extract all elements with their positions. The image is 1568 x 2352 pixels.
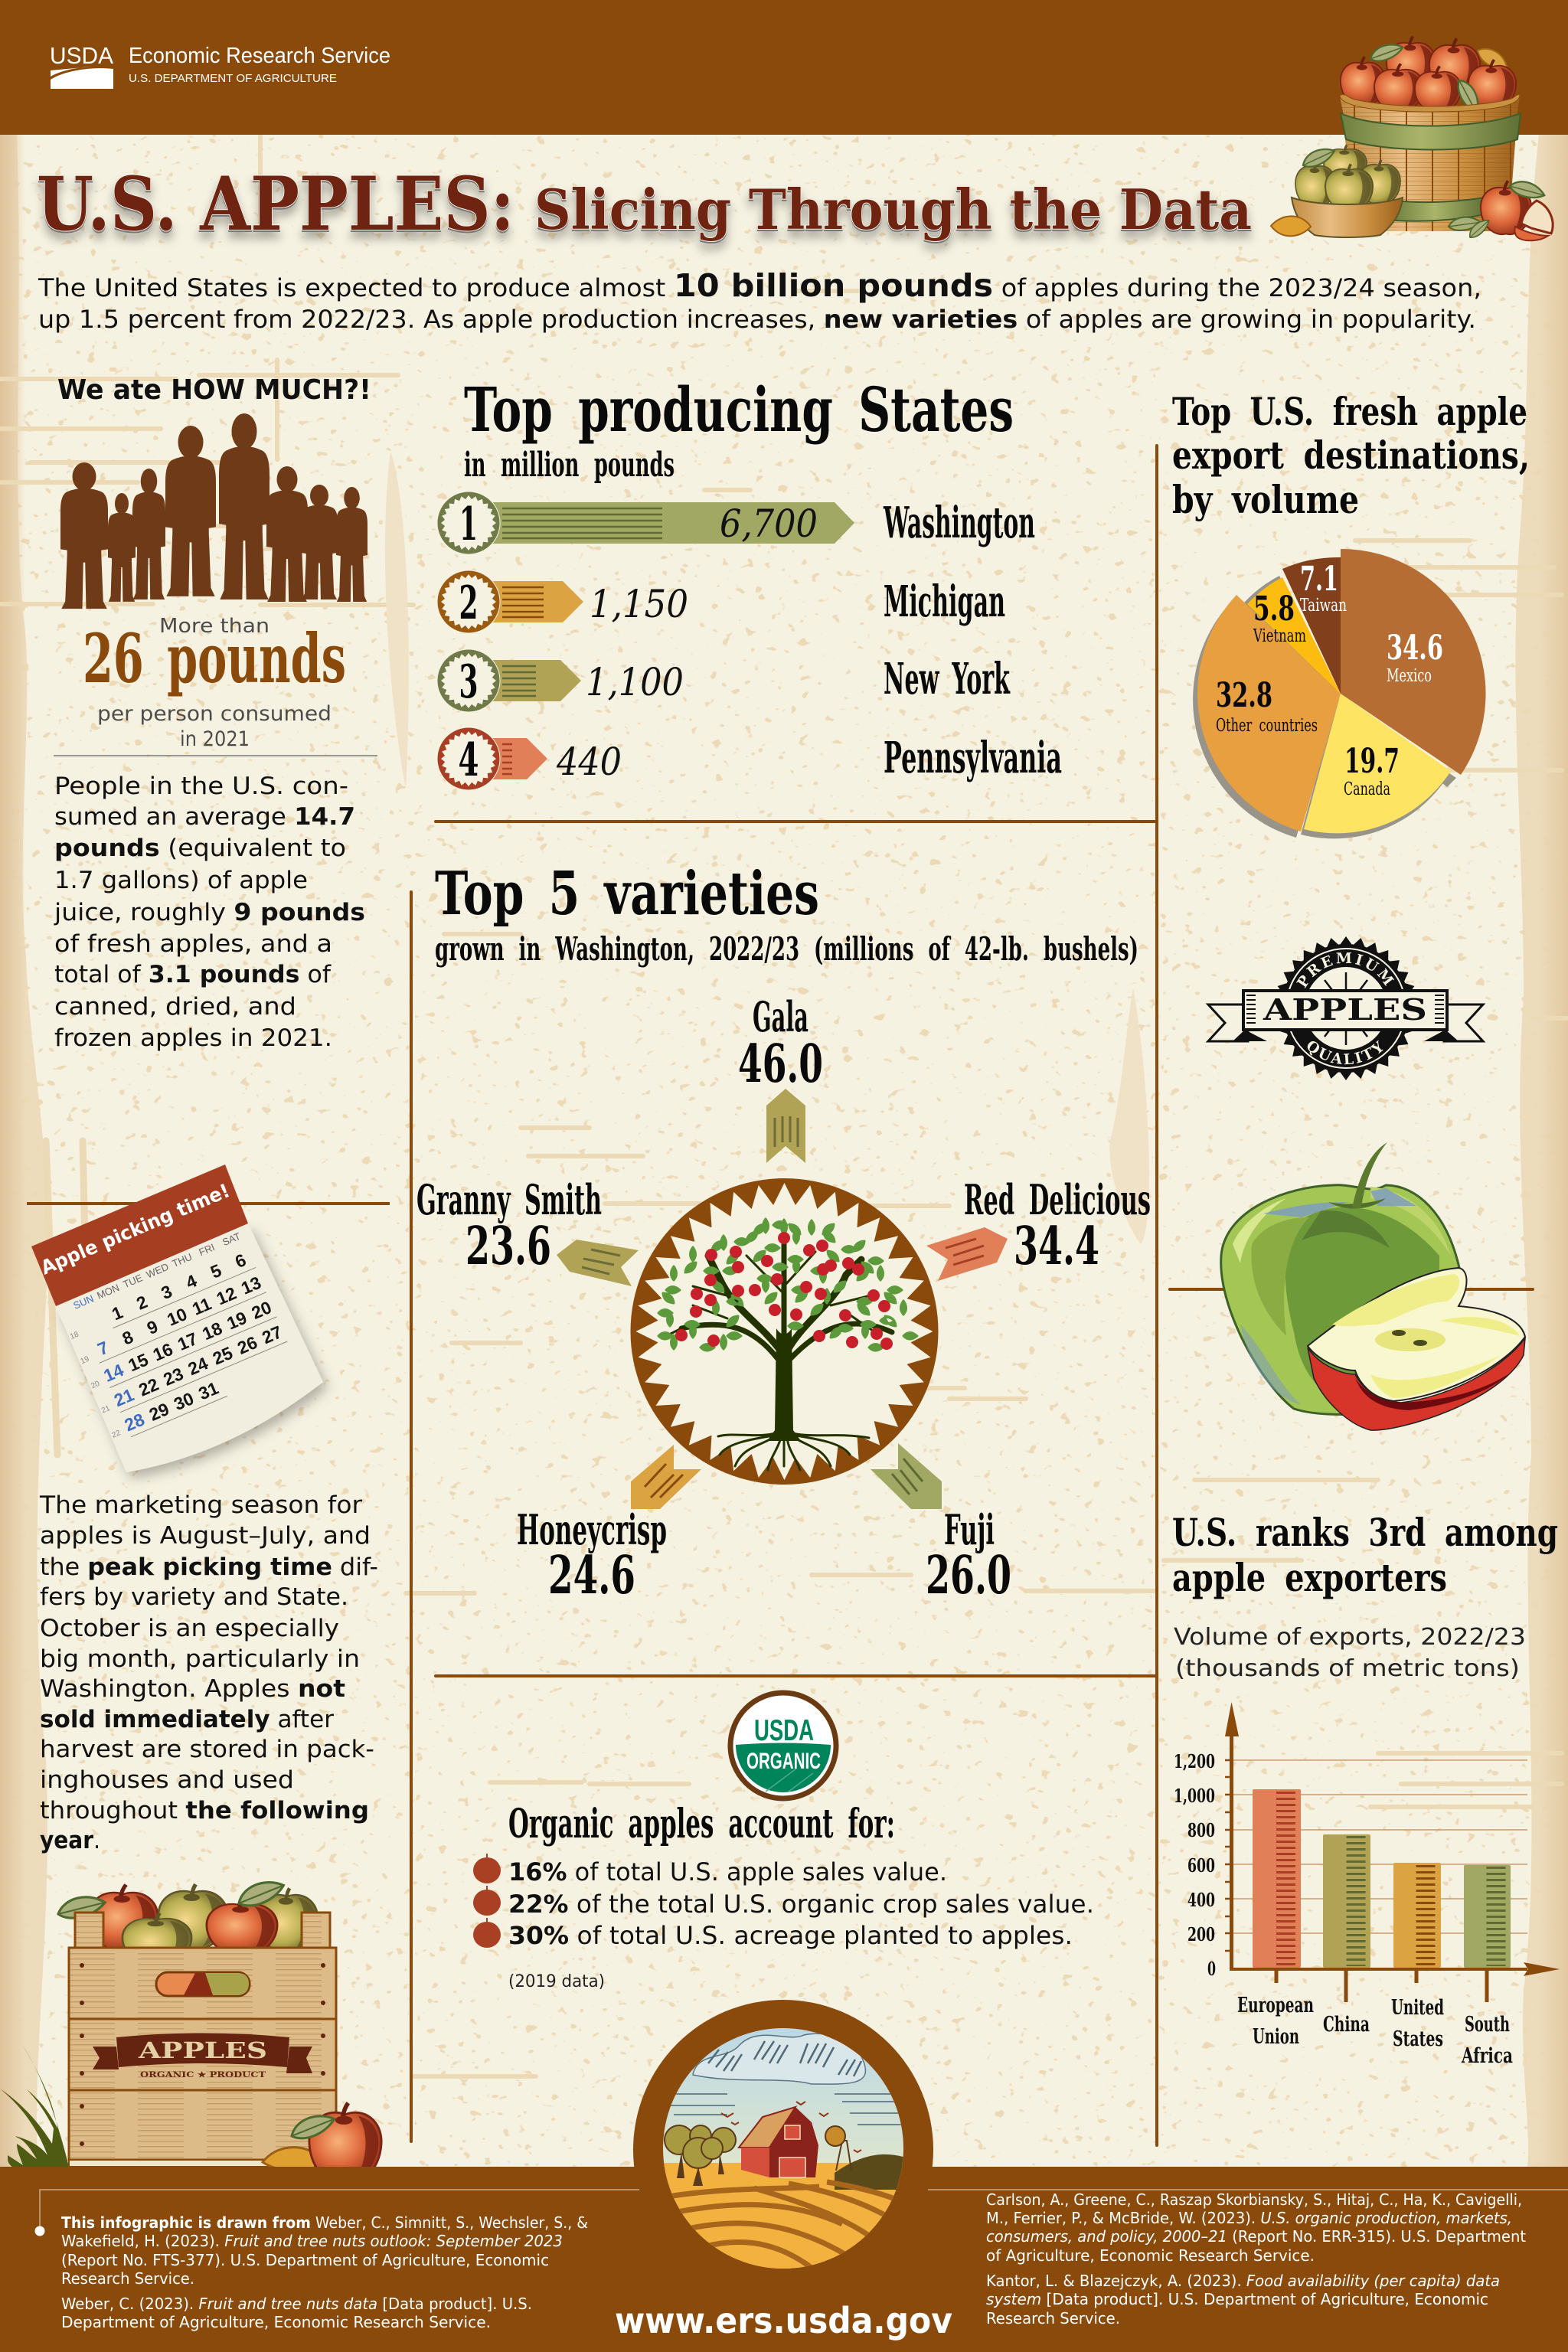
consumption text: pounds (equivalent to xyxy=(54,835,346,862)
bar: Michigan 1,150: Michigan xyxy=(884,577,1005,627)
heading: top producing states xyxy=(464,374,1014,485)
variety: Red Delicious: 34.4 xyxy=(1014,1216,1099,1277)
icon: calendar: TUE xyxy=(121,1272,145,1290)
consumption text: frozen apples in 2021. xyxy=(54,1024,332,1052)
title xyxy=(37,161,1252,247)
bar chart: 600 xyxy=(1187,1854,1215,1877)
icon: calendar: WED xyxy=(145,1261,171,1280)
footer sources: right: Research Service. xyxy=(986,2309,1120,2328)
stat list: organic shares xyxy=(473,1854,1094,1950)
bar: Michigan 1,150: 1,150 xyxy=(590,582,688,626)
footer sources: left: Weber, C. (2023). Fruit and tree nuts data [Data product]. U.S. xyxy=(61,2295,532,2313)
icon: USDA organic seal: USDA xyxy=(754,1714,814,1747)
heading: export destinations xyxy=(1172,389,1530,522)
icon: calendar: 16 xyxy=(150,1339,176,1365)
icon: calendar: 19 xyxy=(80,1354,91,1366)
variety: Granny Smith: Granny Smith xyxy=(416,1175,602,1224)
icon: calendar: 2 xyxy=(133,1292,150,1314)
pie chart xyxy=(1193,549,1486,838)
icon: calendar: 27 xyxy=(259,1321,285,1348)
footer band xyxy=(0,2167,1568,2352)
stat: 26 pounds: 26 pounds xyxy=(83,619,346,698)
variety: Red Delicious: Red Delicious xyxy=(964,1175,1151,1224)
marketing season text: fers by variety and State. xyxy=(40,1583,348,1611)
stat: 26 pounds: in 2021 xyxy=(180,727,250,751)
icon: calendar: 1 xyxy=(109,1302,126,1324)
bar chart: Union xyxy=(1253,2025,1299,2049)
bar: Washington 6,700: 1 xyxy=(459,498,478,551)
icon: calendar: 24 xyxy=(185,1353,211,1379)
icon: calendar: 23 xyxy=(160,1364,186,1390)
consumption text: juice, roughly 9 pounds xyxy=(54,899,365,926)
footer sources: left: Research Service. xyxy=(61,2269,194,2288)
bar: Pennsylvania 440: Pennsylvania xyxy=(884,733,1062,783)
marketing season text: Washington. Apples not xyxy=(40,1675,345,1703)
stat list: organic shares: 16% of total U.S. apple sales value. xyxy=(508,1857,947,1886)
variety: Fuji: Fuji xyxy=(944,1505,995,1554)
pie chart: 5.8 xyxy=(1253,590,1295,629)
marketing season text: the peak picking time dif- xyxy=(40,1553,378,1581)
chart subtitle xyxy=(1174,1624,1526,1682)
icon: calendar: 15 xyxy=(126,1349,151,1375)
marketing season text: sold immediately after xyxy=(40,1706,334,1733)
icon: calendar: SUN xyxy=(71,1292,96,1312)
footer sources: left: (Report No. FTS-377). U.S. Department of Agriculture, Economic xyxy=(61,2251,549,2269)
variety: Honeycrisp: Honeycrisp xyxy=(517,1505,667,1554)
icon: calendar: 8 xyxy=(119,1327,136,1349)
bar: Michigan 1,150: 2 xyxy=(459,577,478,630)
icon: calendar: THU xyxy=(171,1251,194,1269)
stat: 26 pounds: More than xyxy=(159,615,270,638)
icon: calendar: 25 xyxy=(210,1343,236,1369)
icon: calendar: MON xyxy=(95,1282,121,1302)
footer sources: left xyxy=(35,2190,1568,2331)
bar chart xyxy=(1174,1702,1560,2068)
footer sources: right: of Agriculture, Economic Research Service. xyxy=(986,2246,1315,2265)
variety: Granny Smith xyxy=(416,1175,639,1286)
marketing season text: harvest are stored in pack- xyxy=(40,1736,374,1763)
header band xyxy=(0,0,1568,135)
heading: U.S. ranks 3rd xyxy=(1172,1510,1558,1600)
consumption text: total of 3.1 pounds of xyxy=(54,961,332,988)
icon: calendar: 17 xyxy=(175,1328,201,1354)
USDA logo: Economic Research Service xyxy=(129,44,390,68)
icon: calendar: 13 xyxy=(238,1272,264,1298)
panel: top 5 varieties xyxy=(416,859,1151,1606)
illustration: apple crate: ORGANIC ★ PRODUCT xyxy=(140,2071,266,2079)
footer sources: right: Kantor, L. & Blazejczyk, A. (2023). Food availability (per capita) data xyxy=(986,2272,1500,2290)
bar chart: States xyxy=(1393,2027,1443,2051)
icon: calendar: 31 xyxy=(195,1377,221,1403)
illustration: apple crate: APPLES xyxy=(138,2037,267,2063)
intro text xyxy=(38,267,1481,334)
variety: Granny Smith: 23.6 xyxy=(466,1216,551,1277)
icon: calendar: 18 xyxy=(69,1330,80,1341)
marketing season text: throughout the following xyxy=(40,1797,369,1824)
icon: calendar: 26 xyxy=(234,1332,260,1358)
icon: calendar: 10 xyxy=(164,1304,190,1330)
column dividers xyxy=(411,446,1533,2145)
bar: New York 1,100: 3 xyxy=(459,655,478,709)
icon: calendar: 4 xyxy=(183,1270,200,1292)
title: U.S. APPLES: xyxy=(37,161,514,247)
pie chart: Vietnam xyxy=(1253,626,1306,646)
illustration: farm scene xyxy=(633,2000,933,2269)
chart subtitle: Volume of exports, 2022/23 xyxy=(1174,1624,1526,1651)
footer sources: right: Carlson, A., Greene, C., Raszap Skorbiansky, S., Hitaj, C., Ha, K., Cavigelli, xyxy=(986,2190,1522,2209)
icon: calendar: Apple picking time! xyxy=(38,1179,233,1279)
bar chart: European xyxy=(1237,1994,1314,2017)
marketing season text: October is an especially xyxy=(40,1615,339,1642)
footer sources: left: Department of Agriculture, Economic Research Service. xyxy=(61,2313,491,2331)
variety: Fuji xyxy=(871,1443,1011,1606)
icon: USDA organic seal xyxy=(730,1693,836,1798)
bar: Pennsylvania 440: 440 xyxy=(556,740,622,784)
variety: Honeycrisp: 24.6 xyxy=(548,1545,635,1606)
bar chart: China xyxy=(1323,2013,1370,2037)
marketing season text xyxy=(39,1491,378,1854)
marketing season text: inghouses and used xyxy=(40,1766,294,1794)
footer sources: right xyxy=(986,2190,1526,2328)
variety: Fuji: 26.0 xyxy=(926,1545,1011,1606)
icon: calendar: 20 xyxy=(249,1297,274,1323)
icon: premium apples quality badge: APPLES xyxy=(1263,992,1427,1027)
icon: calendar: 5 xyxy=(207,1260,224,1282)
heading: top 5 varieties xyxy=(435,859,1138,968)
pie chart: 7.1 xyxy=(1300,560,1338,599)
stat: 26 pounds: per person consumed xyxy=(97,702,332,726)
stat list: organic shares: 22% of the total U.S. organic crop sales value. xyxy=(508,1890,1094,1919)
icon: calendar: FRI xyxy=(197,1241,217,1258)
footer sources: left: Wakefield, H. (2023). Fruit and tree nuts outlook: September 2023 xyxy=(61,2232,563,2250)
icon: family silhouette xyxy=(60,413,368,609)
icon: premium apples quality badge: QUALITY xyxy=(1308,1040,1383,1064)
panel: US export rank xyxy=(1172,1510,1560,2068)
heading: top producing states: in million pounds xyxy=(464,446,675,485)
heading: top 5 varieties: Top 5 varieties xyxy=(435,859,819,929)
marketing season text: big month, particularly in xyxy=(40,1645,360,1673)
pie chart: Other countries xyxy=(1216,716,1318,736)
panel: organic apples xyxy=(473,1693,1094,1991)
bar: Washington 6,700: Washington xyxy=(883,498,1035,548)
heading: top 5 varieties: grown in Washington, 2022/23 (millions of 42-lb. bushels) xyxy=(435,930,1138,968)
bar: Pennsylvania 440: 4 xyxy=(458,733,479,787)
icon: calendar: 7 xyxy=(95,1337,112,1359)
bar: Pennsylvania 440 xyxy=(437,727,1062,790)
bar chart: South xyxy=(1465,2013,1510,2037)
icon: calendar: SAT xyxy=(220,1230,242,1248)
icon: calendar: 22 xyxy=(136,1374,162,1400)
bar chart: 1,200 xyxy=(1174,1750,1215,1772)
icon: apple tree xyxy=(631,1178,939,1485)
bar: New York 1,100: 1,100 xyxy=(586,660,684,704)
icon: premium apples quality badge: PREMIUM xyxy=(1296,952,1395,988)
illustration: apple basket xyxy=(1271,37,1553,240)
left panel: consumption xyxy=(54,374,377,1052)
USDA logo: U.S. DEPARTMENT OF AGRICULTURE xyxy=(129,72,337,85)
icon: calendar: 18 xyxy=(199,1318,225,1344)
icon: calendar xyxy=(31,1165,323,1472)
title: Slicing Through the Data xyxy=(534,177,1252,242)
panel: top producing states xyxy=(437,374,1062,790)
heading: top producing states: Top producing States xyxy=(464,374,1014,446)
bar: Washington 6,700 xyxy=(437,492,1035,554)
icon: calendar: 22 xyxy=(111,1429,122,1440)
icon: calendar: 30 xyxy=(171,1388,197,1414)
stat list: organic shares: 30% of total U.S. acreage planted to apples. xyxy=(508,1921,1073,1950)
icon: calendar: 14 xyxy=(100,1360,126,1386)
icon: calendar: 21 xyxy=(100,1404,112,1416)
variety: Gala: 46.0 xyxy=(738,1034,823,1095)
variety: Red Delicious xyxy=(926,1175,1151,1281)
pie chart: 34.6 xyxy=(1387,629,1443,668)
note: 2019 data: (2019 data) xyxy=(508,1972,605,1991)
website URL: www.ers.usda.gov xyxy=(615,2300,952,2341)
marketing season text: apples is August–July, and xyxy=(40,1522,371,1550)
pie chart: Mexico xyxy=(1387,666,1432,686)
marketing season text: The marketing season for xyxy=(39,1491,362,1519)
consumption text: People in the U.S. con- xyxy=(54,773,348,800)
variety: Gala xyxy=(738,992,823,1163)
pie chart: Canada xyxy=(1344,779,1390,799)
footer sources: left: This infographic is drawn from Weber, C., Simnitt, S., Wechsler, S., & xyxy=(61,2213,588,2232)
bar chart: 1,000 xyxy=(1174,1785,1215,1807)
consumption text: of fresh apples, and a xyxy=(54,930,332,958)
illustration: green apple with slice xyxy=(1221,1142,1525,1430)
heading: we ate how much: We ate HOW MUCH?! xyxy=(57,374,371,406)
icon: calendar: 9 xyxy=(144,1316,161,1338)
bar: New York 1,100: New York xyxy=(884,654,1011,704)
footer sources: right: consumers, and policy, 2000–21 (Report No. ERR-315). U.S. Department xyxy=(986,2227,1526,2246)
intro text: The United States is expected to produce almost 10 billion pounds of apples during the 2023/24 season, xyxy=(38,267,1481,304)
heading: export destinations: by volume xyxy=(1172,477,1359,522)
bar: Washington 6,700: 6,700 xyxy=(720,501,818,546)
bar: Michigan 1,150 xyxy=(437,570,1005,633)
icon: premium apples quality badge xyxy=(1205,936,1485,1080)
consumption text: sumed an average 14.7 xyxy=(54,803,355,831)
consumption text xyxy=(54,773,365,1052)
icon: calendar: 12 xyxy=(214,1283,239,1308)
icon: calendar: 28 xyxy=(122,1409,148,1435)
variety: Gala: Gala xyxy=(753,992,808,1041)
pie chart: 32.8 xyxy=(1216,676,1272,715)
illustration: apple crate xyxy=(0,1875,381,2190)
variety: Honeycrisp xyxy=(517,1445,701,1606)
consumption text: 1.7 gallons) of apple xyxy=(54,867,308,894)
icon: calendar: 3 xyxy=(158,1281,175,1303)
pie chart: Taiwan xyxy=(1300,596,1347,616)
bar chart: Africa xyxy=(1461,2044,1513,2068)
heading: organic apples account for: Organic apples account for: xyxy=(508,1801,895,1847)
icon: calendar: 29 xyxy=(146,1399,172,1425)
bar chart: United xyxy=(1391,1996,1444,2020)
USDA logo: USDA xyxy=(50,42,113,69)
marketing season text: year. xyxy=(40,1827,100,1854)
icon: calendar: 19 xyxy=(224,1308,250,1334)
icon: USDA organic seal: ORGANIC xyxy=(746,1749,821,1774)
bar: New York 1,100 xyxy=(437,649,1011,712)
chart subtitle: (thousands of metric tons) xyxy=(1175,1655,1520,1682)
icon: calendar: 11 xyxy=(189,1293,214,1319)
pie chart: 19.7 xyxy=(1344,742,1400,781)
USDA logo xyxy=(50,42,390,89)
bar chart: 800 xyxy=(1187,1819,1215,1841)
bar chart: 400 xyxy=(1187,1889,1215,1911)
stat: 26 pounds xyxy=(83,615,346,751)
footer sources: right: M., Ferrier, P., & McBride, W. (2023). U.S. organic production, markets, xyxy=(986,2209,1512,2227)
icon: calendar: 20 xyxy=(90,1380,101,1390)
footer sources: right: system [Data product]. U.S. Department of Agriculture, Economic xyxy=(986,2290,1488,2308)
bar chart: 200 xyxy=(1187,1923,1215,1945)
icon: calendar: 6 xyxy=(232,1250,249,1272)
consumption text: canned, dried, and xyxy=(54,993,296,1021)
icon: calendar: 21 xyxy=(111,1384,137,1410)
heading: U.S. ranks 3rd: apple exporters xyxy=(1172,1555,1447,1600)
panel: export destinations xyxy=(1172,389,1530,838)
bar chart: 0 xyxy=(1207,1958,1216,1980)
intro text: up 1.5 percent from 2022/23. As apple production increases, new varieties of apples are growing in popularity. xyxy=(38,305,1476,334)
